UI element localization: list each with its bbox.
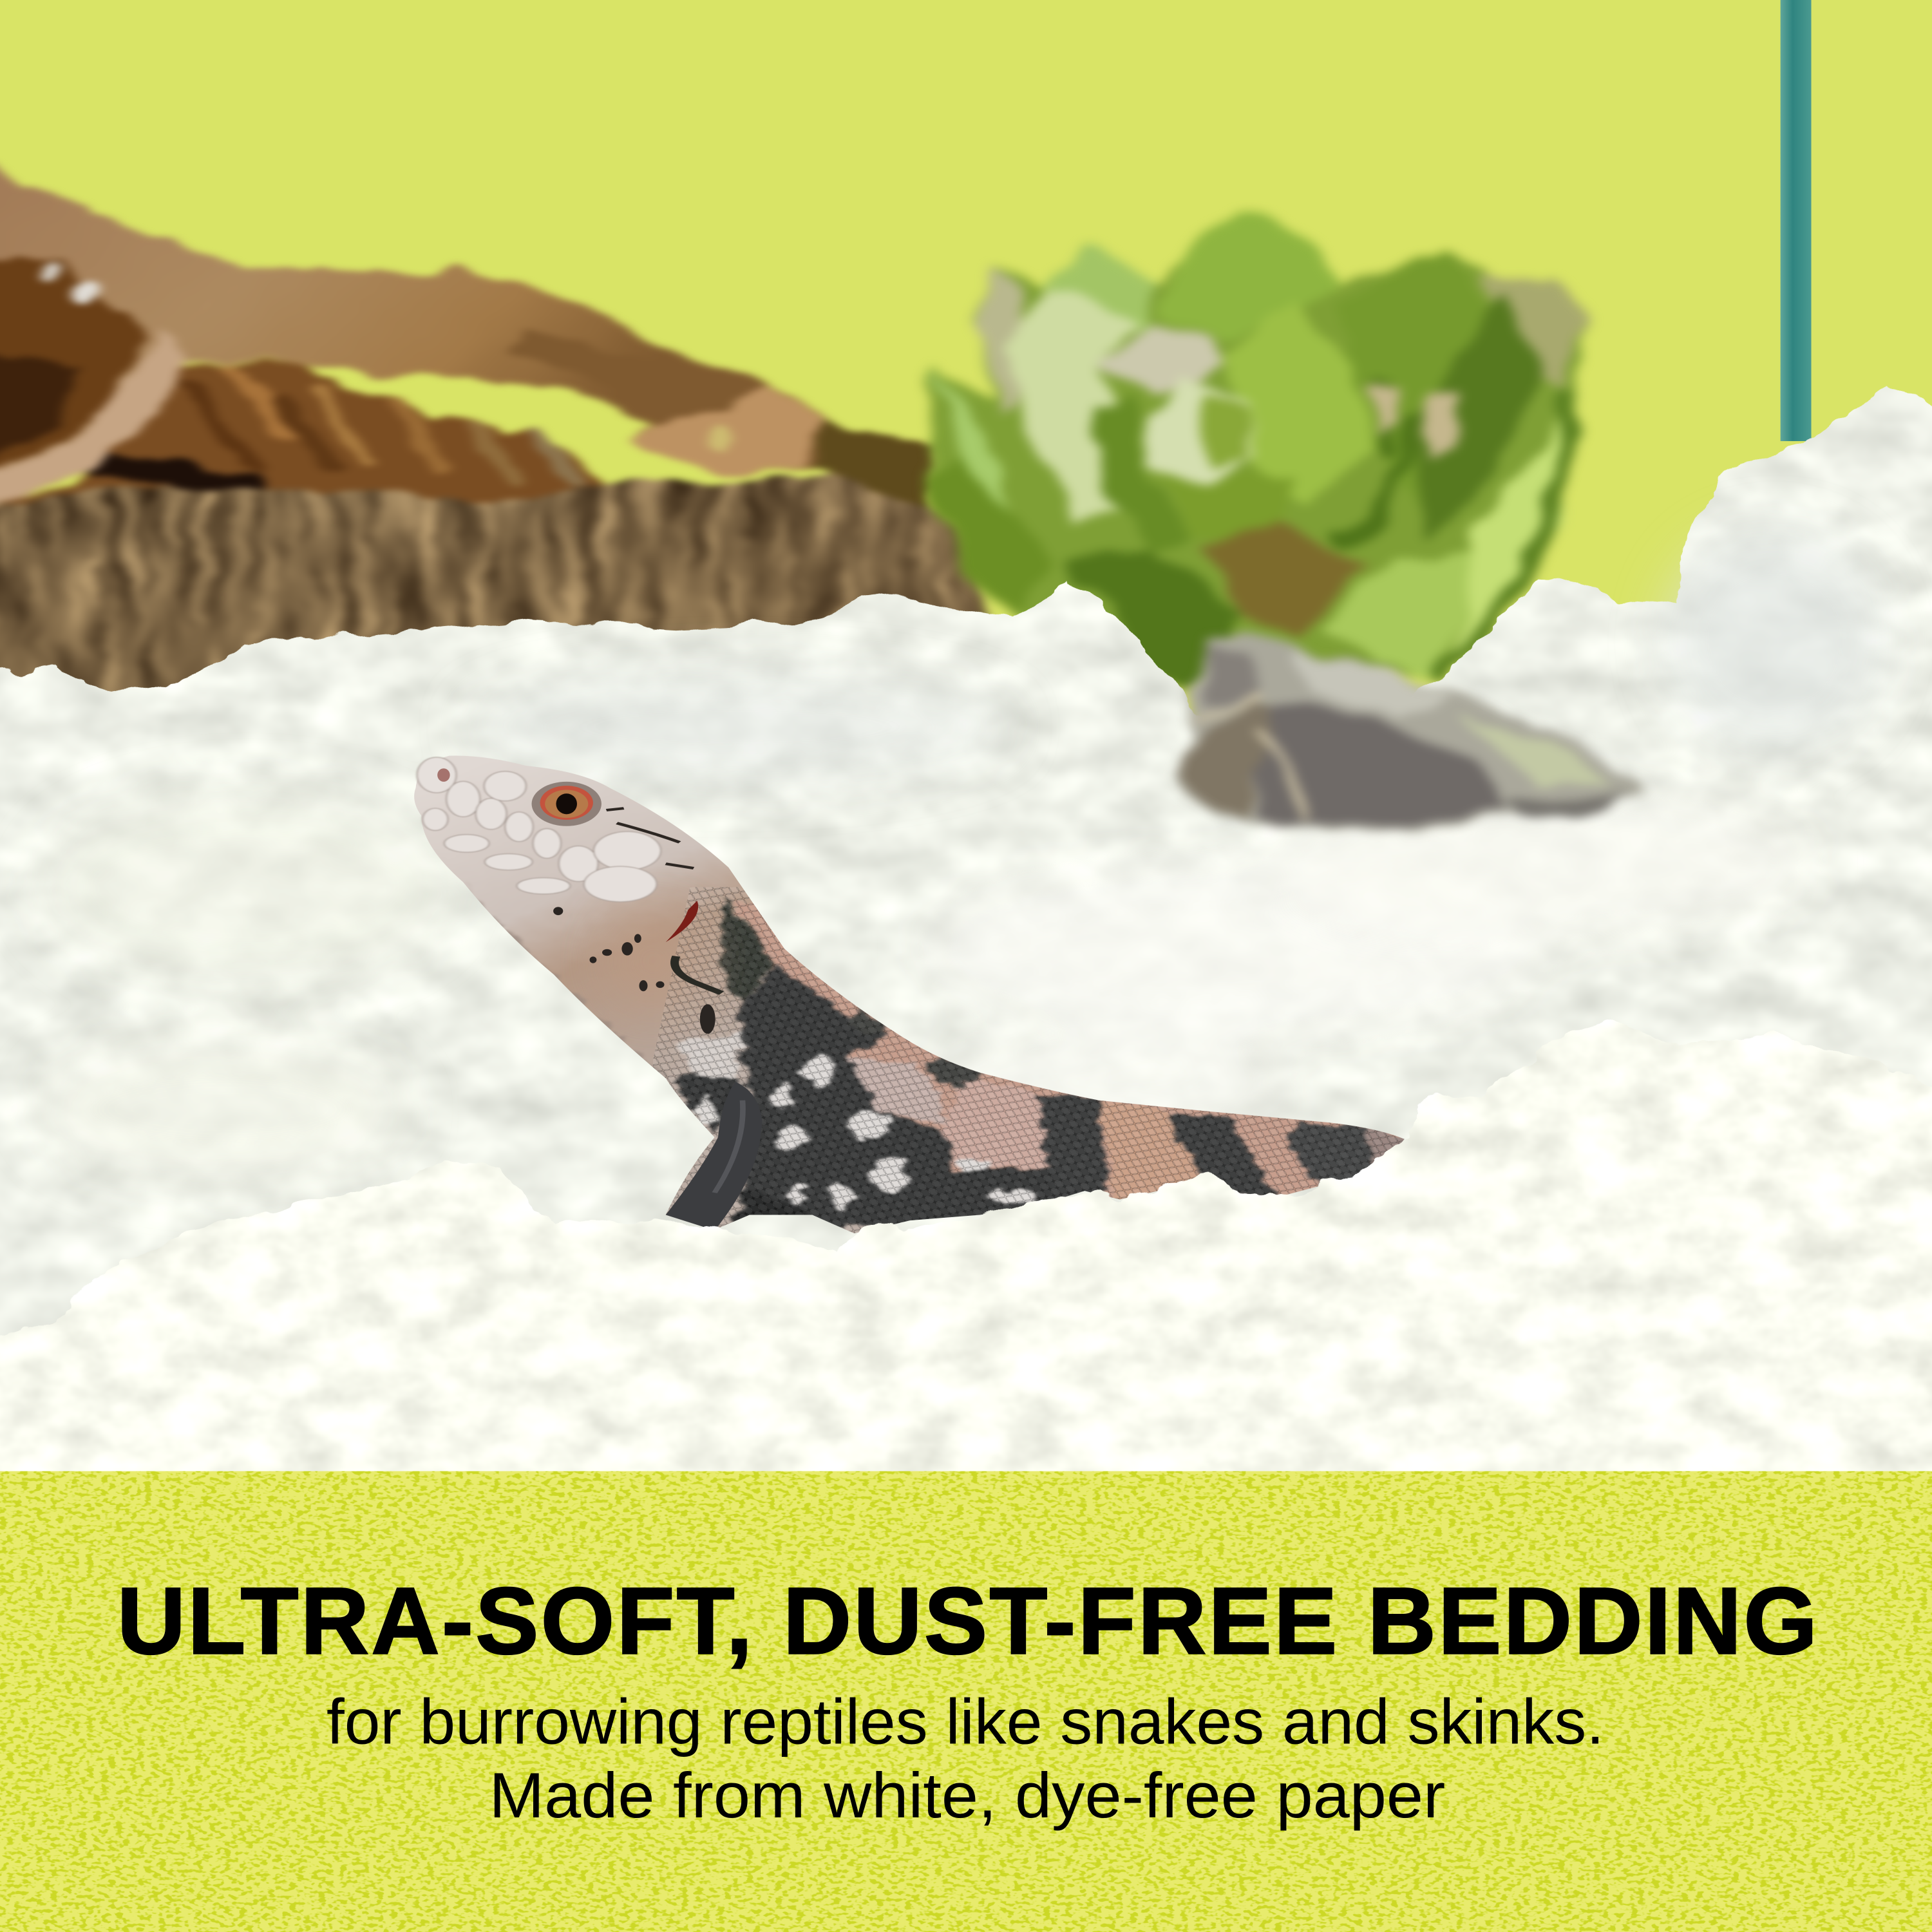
lower log [0,472,1010,713]
bottom-right light leaf [1321,554,1479,677]
dark line behind eye [607,808,694,868]
inner right stems [1345,390,1414,538]
tan left facet [1178,698,1276,817]
bottom panel [0,1471,1932,1932]
pink body band highlight [942,1078,1050,1167]
shoulder blotch [851,1008,980,1091]
top center leaf [1158,212,1340,341]
salmon tail band [1099,1101,1214,1204]
pink tips [1370,386,1459,460]
dark bark mid piece [0,364,616,518]
upper branch [0,162,936,518]
front bedding mound [0,1020,1932,1515]
dark neck mark [720,895,774,1001]
dark shoulder and flank [735,967,1057,1226]
upper-right large leaf [1336,255,1508,534]
right pale leaf [1444,399,1577,674]
upper-right pale leaf [1479,278,1582,386]
textured lime band [0,1471,1932,1932]
deep shadow in hollow [0,350,80,469]
lime gap in knot [712,428,736,453]
heading: ULTRA-SOFT, DUST-FREE BEDDING [117,1569,1817,1674]
right dark facet [1513,793,1626,819]
dark tail band 3 [1287,1122,1378,1189]
subtext line 1: for burrowing reptiles like snakes and skinks. [327,1686,1604,1757]
dark tail band 1 [1039,1093,1109,1204]
bark ridges [105,368,573,486]
center leaf [1222,300,1370,509]
right leaf rim [1444,394,1569,674]
ear opening [666,901,698,942]
dark facet main [1256,703,1513,825]
eye rim [540,786,593,820]
succulent plant [924,212,1582,690]
lizard [414,756,1405,1234]
neck spots [553,907,715,1034]
neck band mark [675,956,721,993]
head shadow along throat [463,882,666,1078]
eye socket [532,782,601,826]
chest dark marks [676,1065,743,1135]
upper-left leaf [1047,245,1155,357]
arm highlight [715,1101,743,1193]
back bedding texture [0,386,1932,1336]
scale texture on body [653,887,1417,1244]
thin far-left leaf [931,366,1015,530]
dark-left leaf [1096,399,1197,551]
background: lime wall [0,0,1932,1471]
nostril [437,768,450,782]
red-brown leaf [1197,518,1365,637]
subtext line 2: Made from white, dye-free paper [489,1760,1445,1832]
far-left pale leaf [981,263,1025,411]
pale left rosette leaf [1005,283,1148,522]
bedding shading [37,530,1885,1183]
small central bud [1143,374,1259,485]
branch knot [634,386,826,476]
back bedding layer [0,386,1932,1336]
chest pale scales [679,1034,743,1078]
teal rod [1781,0,1811,441]
front arm [666,1082,762,1231]
yellow-green light patch [1459,715,1611,784]
pale vein [1202,690,1306,817]
dark facet left [1202,649,1266,710]
pale top facet [1296,649,1454,719]
bud green [1197,390,1254,464]
pupil [556,793,577,814]
lizard body colouring [414,756,1405,1234]
pale pink center-left leaf [1104,325,1222,399]
dark branch end [813,416,936,507]
tail tip [1364,1126,1413,1171]
base head and neck [345,723,1462,1256]
center dark lower [1158,477,1296,534]
bottom dark leaf [1065,546,1247,690]
dark tail band 2 [1168,1113,1276,1197]
pale flecks on wood [41,262,58,281]
tan neck glow [601,912,705,1010]
driftwood [0,162,1010,713]
lower-left leaf [924,456,1050,620]
dark hollow at left [0,260,148,479]
stone body [1175,639,1638,829]
dark gap right [1414,292,1537,542]
iris [545,790,588,818]
head scales [417,757,661,902]
pale rim of hollow [0,326,185,514]
pale flank scales [848,1059,945,1126]
white spots [772,1054,1040,1211]
stone [1175,639,1638,829]
dark rear leg shadow [735,1189,812,1226]
branch shading [511,329,733,423]
lizard head details [417,757,762,1231]
salmon back and tail [735,901,1434,1226]
rosette base [924,212,1582,690]
